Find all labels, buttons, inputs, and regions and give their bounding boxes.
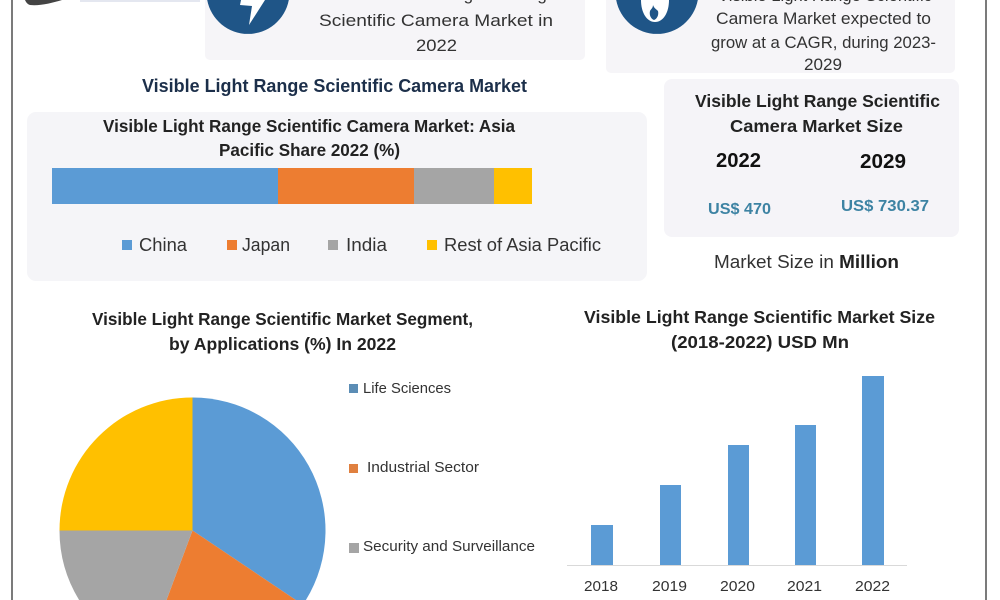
callout text: Camera Market expected to xyxy=(716,10,931,28)
stacked bar legend xyxy=(122,235,601,255)
bar chart axis labels: 2018 xyxy=(584,578,618,595)
pie chart heading: Visible Light Range Scientific Market Segment, xyxy=(92,309,473,329)
callout text: Scientific Camera Market in xyxy=(319,11,553,30)
stacked bar chart xyxy=(52,168,532,204)
bar chart axis labels: 2021 xyxy=(787,578,822,595)
logo fragment xyxy=(25,0,200,5)
icon: lightning bolt xyxy=(207,0,289,34)
year 2022 value: 2022 xyxy=(716,150,761,172)
pie chart heading: by Applications (%) In 2022 xyxy=(169,334,396,354)
callout text: 2029 xyxy=(804,56,842,74)
main title: Visible Light Range Scientific Camera Market xyxy=(142,75,527,96)
stacked bar legend: Japan xyxy=(242,235,290,255)
year 2029 value: US$ 730.37 xyxy=(841,198,929,215)
callout text: grow at a CAGR, during 2023- xyxy=(711,34,936,52)
pie legend: Industrial Sector xyxy=(367,460,479,476)
bar chart axis labels: 2022 xyxy=(855,578,890,595)
callout text xyxy=(319,0,556,55)
year 2022 value xyxy=(708,150,771,218)
panel: leading region callout xyxy=(205,0,585,60)
panel: CAGR callout xyxy=(606,0,955,74)
year 2029 value xyxy=(841,151,929,215)
callout text xyxy=(711,0,936,74)
market size heading: Camera Market Size xyxy=(730,116,903,136)
share chart heading: Pacific Share 2022 (%) xyxy=(219,140,400,160)
panel: market size xyxy=(664,79,959,237)
pie legend xyxy=(349,381,535,555)
bar chart axis labels: 2019 xyxy=(652,578,687,595)
share chart heading xyxy=(103,116,515,160)
market size heading xyxy=(695,91,940,136)
pie chart xyxy=(60,397,326,600)
bar chart axis labels xyxy=(584,578,890,595)
pie legend: Security and Surveillance xyxy=(363,539,535,555)
pie chart heading xyxy=(92,309,473,354)
bar chart heading: Visible Light Range Scientific Market Size xyxy=(584,307,935,327)
panel: Asia Pacific share xyxy=(27,112,647,281)
bar chart xyxy=(567,376,907,595)
stacked bar legend: Rest of Asia Pacific xyxy=(444,235,601,255)
pie legend: Life Sciences xyxy=(363,381,451,397)
year 2029 value: 2029 xyxy=(860,151,906,173)
bar chart axis labels: 2020 xyxy=(720,578,755,595)
stacked bar legend: China xyxy=(139,235,188,255)
bar chart heading: (2018-2022) USD Mn xyxy=(671,332,849,352)
market size unit note: Market Size in Million xyxy=(714,252,899,272)
icon: flame xyxy=(616,0,698,34)
share chart heading: Visible Light Range Scientific Camera Market: Asia xyxy=(103,116,515,136)
callout text: 2022 xyxy=(416,36,457,55)
year 2022 value: US$ 470 xyxy=(708,201,771,218)
bar chart heading xyxy=(584,307,935,352)
stacked bar legend: India xyxy=(346,235,388,255)
market size heading: Visible Light Range Scientific xyxy=(695,91,940,111)
